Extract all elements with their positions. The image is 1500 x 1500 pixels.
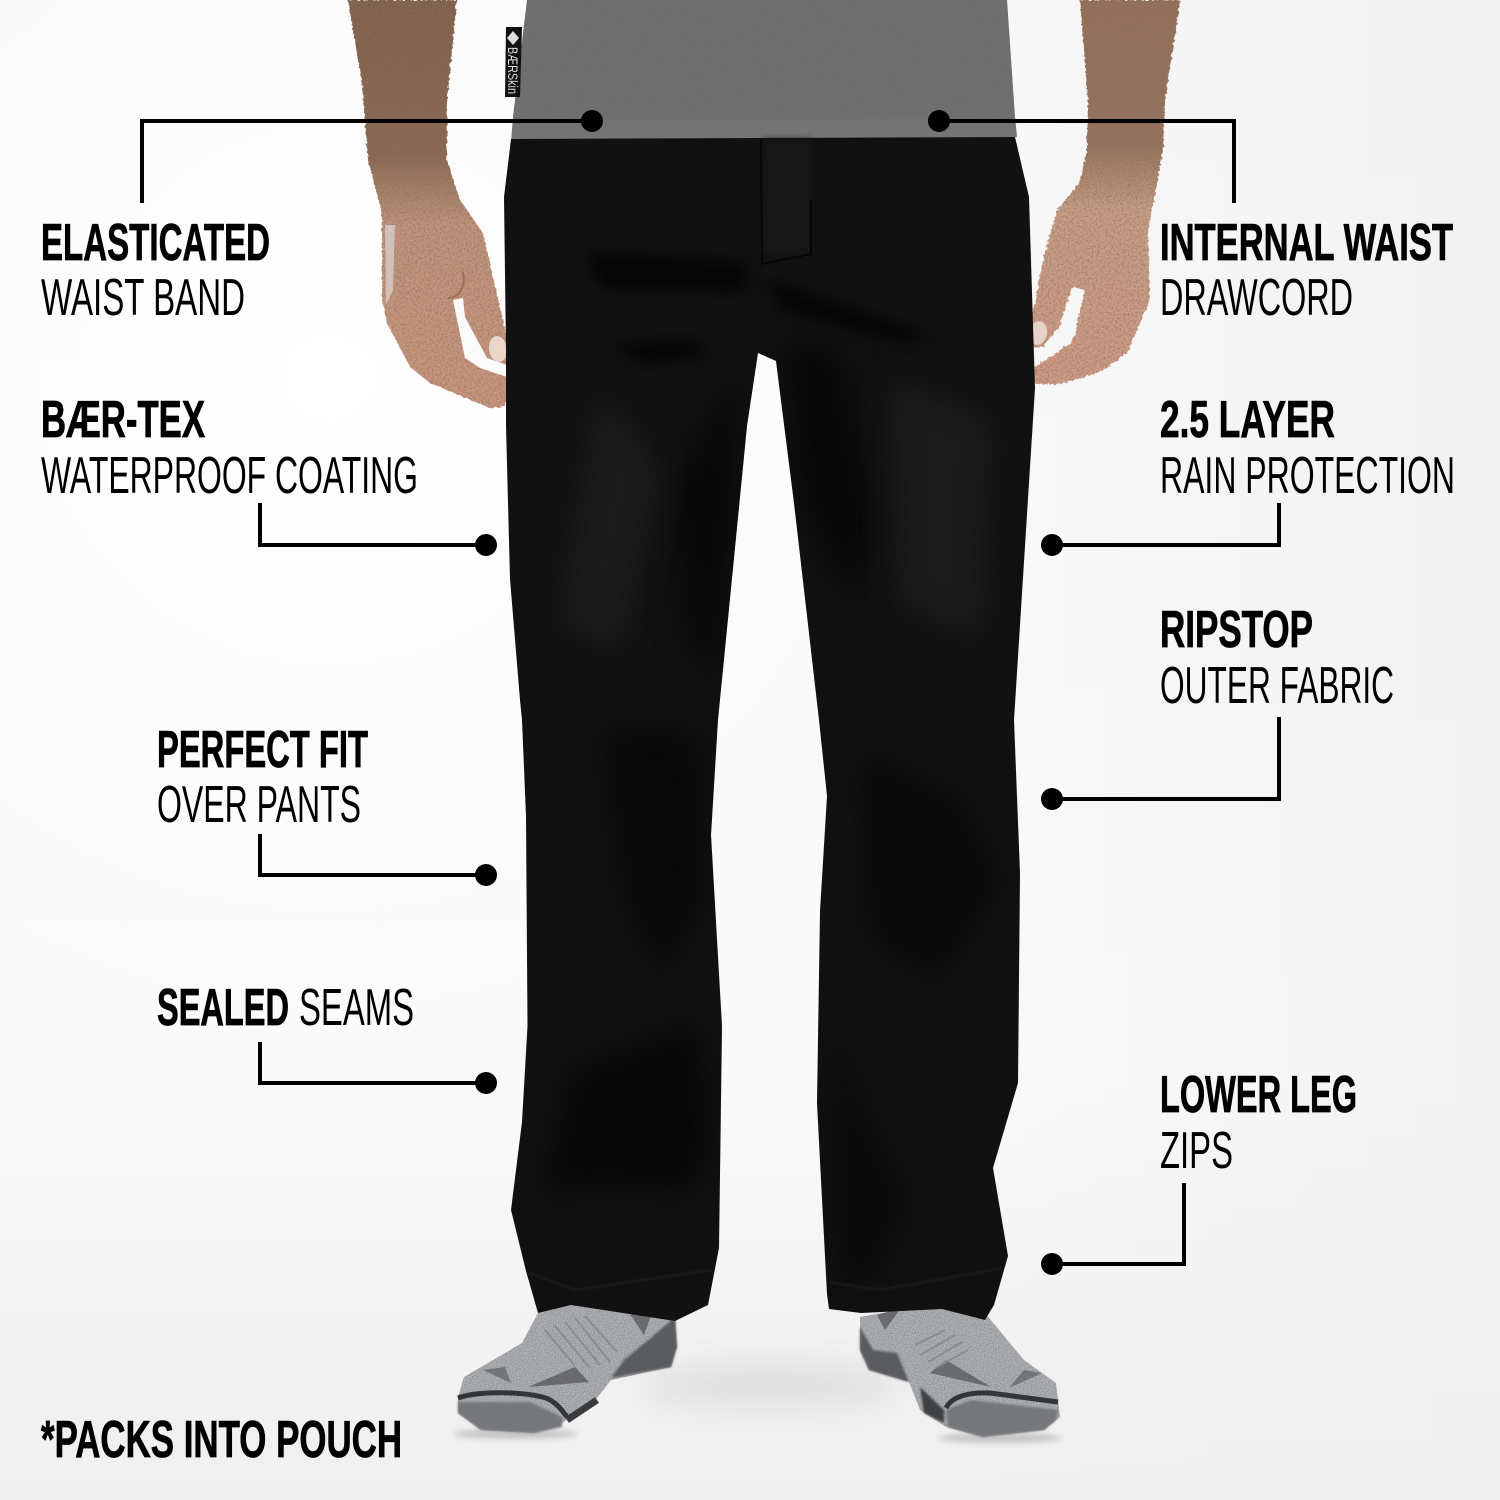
grey t-shirt [505,0,1017,143]
pants fly [761,139,811,264]
callout: lower leg zips: LOWER LEG [1160,1066,1357,1124]
callout: 2.5 layer rain protection: 2.5 LAYER [1160,391,1335,449]
callout: ripstop outer fabric: RIPSTOP [1160,601,1313,659]
left sock [458,1298,677,1433]
left arm and hand [348,0,513,408]
callout: perfect fit over pants: OVER PANTS [157,776,361,834]
callout: baer-tex waterproof coating: WATERPROOF COATING [41,447,418,505]
callout: sealed seams [157,979,497,1094]
callout: internal waist drawcord: DRAWCORD [1160,269,1353,327]
brand tag [505,27,522,97]
callout: elasticated waist band: WAIST BAND [41,269,245,327]
callout: baer-tex waterproof coating [41,391,497,556]
footnote: packs into pouch: *PACKS INTO POUCH [41,1411,402,1469]
callout: baer-tex waterproof coating: BÆR-TEX [41,391,205,449]
right sock [860,1302,1060,1437]
callout: sealed seams: SEAMS [299,979,414,1037]
callout: lower leg zips [1041,1066,1357,1275]
callout: elasticated waist band: ELASTICATED [41,214,270,272]
callout: 2.5 layer rain protection [1041,391,1455,556]
callout: internal waist drawcord [928,110,1453,327]
callout: perfect fit over pants [157,721,497,886]
callout: perfect fit over pants: PERFECT FIT [157,721,368,779]
callout: ripstop outer fabric [1041,601,1394,810]
black rain pants [504,137,1035,1321]
callout: elasticated waist band [41,110,603,327]
brand tag: BÆRSkin [505,47,521,94]
right arm and hand [1027,0,1180,385]
callout: sealed seams: SEALED [157,979,289,1037]
callout: lower leg zips: ZIPS [1160,1122,1233,1180]
